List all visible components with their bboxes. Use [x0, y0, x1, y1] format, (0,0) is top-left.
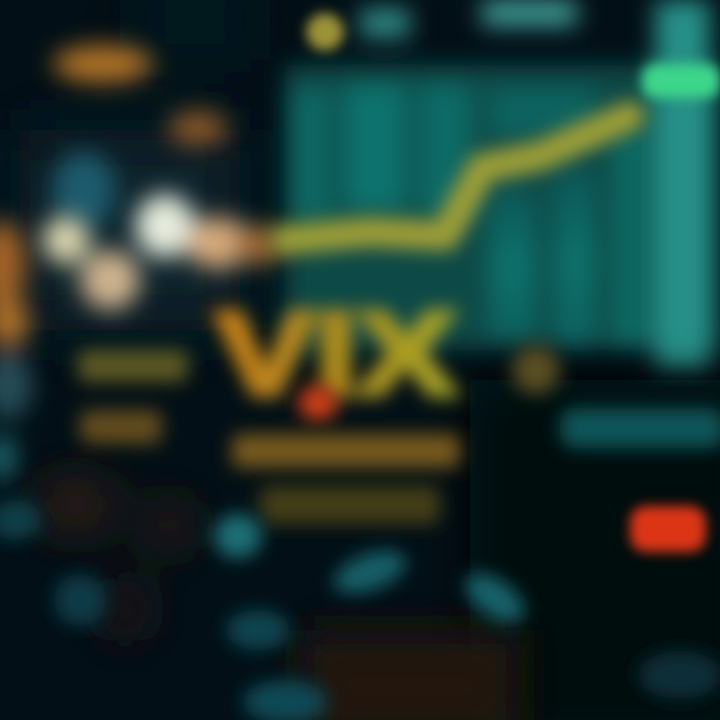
- panel: right teal bar: [560, 408, 720, 448]
- text block: second line: [260, 486, 440, 524]
- icon: right dim badge: [512, 346, 560, 394]
- panel: dark lower right: [470, 380, 720, 720]
- icon: green value marker: [642, 64, 720, 98]
- title: VIX: [216, 288, 456, 420]
- icon: top yellow dot: [306, 13, 344, 51]
- text block: left labels: [78, 350, 188, 444]
- icon: red indicator: [630, 506, 706, 552]
- panel: ambient tones: [20, 0, 260, 330]
- line chart: rising yellow line: [285, 116, 630, 240]
- icon: red marker: [298, 385, 338, 421]
- panel: upper left glow lights: [0, 45, 228, 482]
- chart highlights: bright candles: [42, 194, 282, 310]
- panel: teal chart backdrop: [285, 0, 720, 372]
- text block: subtitle line: [232, 434, 460, 468]
- icons: bottom teal blobs: [0, 500, 720, 720]
- panel: bottom brown tones: [32, 475, 520, 720]
